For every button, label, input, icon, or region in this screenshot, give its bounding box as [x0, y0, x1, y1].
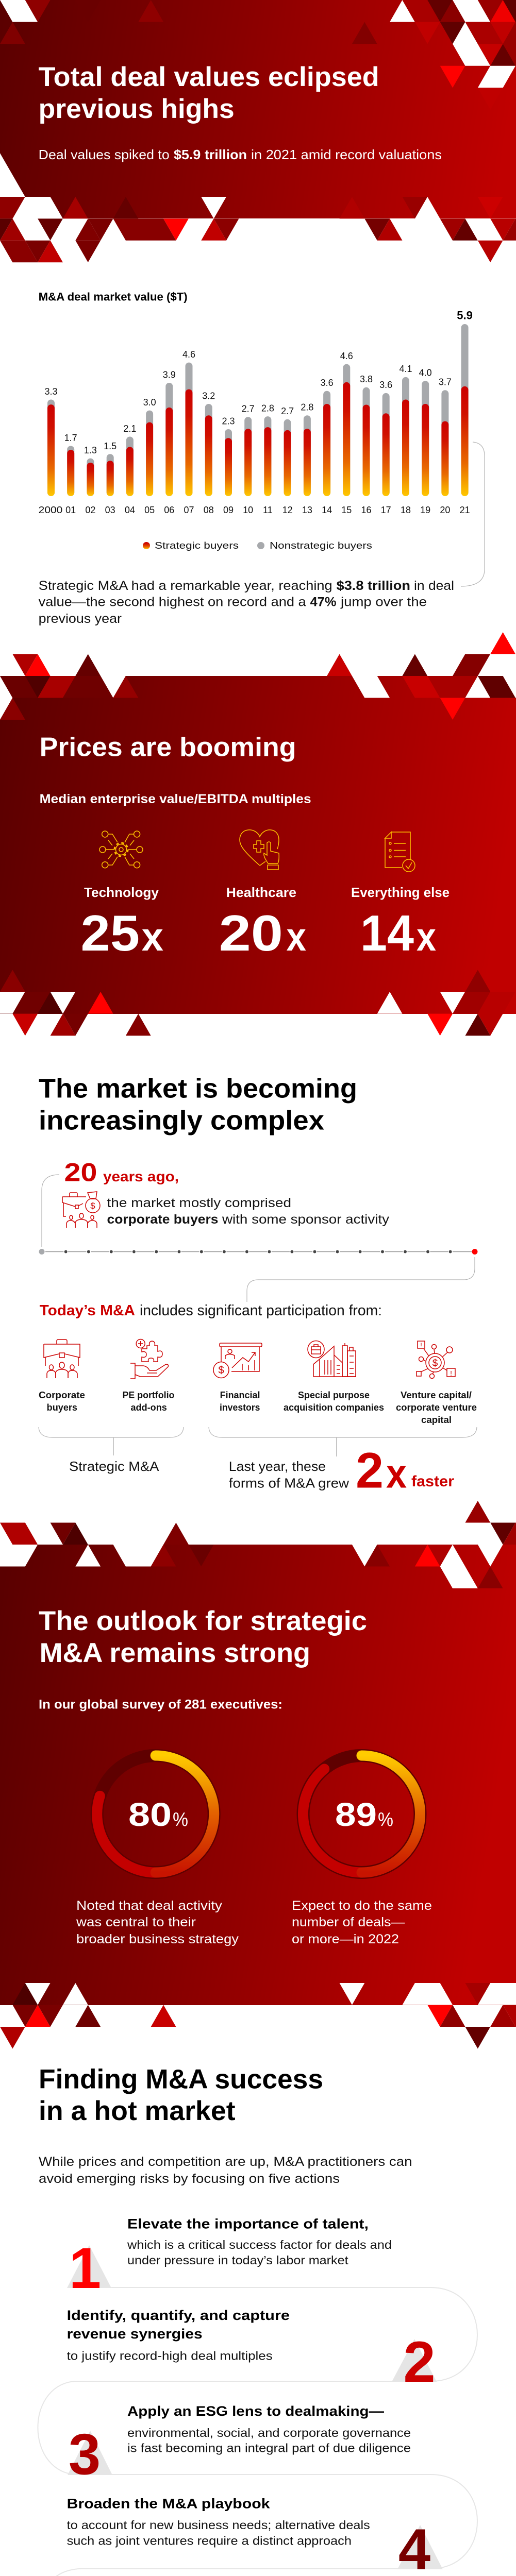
bar value labels: 2.1 — [123, 423, 136, 434]
x-axis year labels: 15 — [341, 505, 352, 515]
text: market comprised: the market mostly comprised — [107, 1196, 291, 1210]
x-axis year labels — [39, 505, 470, 515]
text: 20 years ago: 20 — [64, 1158, 97, 1187]
stat: technology: 25 — [80, 905, 140, 961]
x-axis year labels: 18 — [401, 505, 411, 515]
triangles: hero top — [0, 0, 516, 110]
panel: prices are booming — [0, 632, 516, 1036]
intro text: avoid emerging risks by focusing on five actions — [39, 2172, 340, 2186]
chart legend — [143, 540, 372, 551]
icon: PE portfolio add-ons — [130, 1340, 168, 1379]
x-axis year labels: 12 — [282, 505, 293, 515]
bar value labels: 3.0 — [143, 397, 156, 408]
x-axis year labels: 19 — [420, 505, 430, 515]
stat: technology — [80, 885, 163, 961]
bar value labels: 3.3 — [44, 386, 58, 397]
text: strategic M&A: Strategic M&A — [69, 1459, 159, 1474]
bar value labels: 2.8 — [261, 403, 274, 413]
connector: timeline to today — [247, 1257, 475, 1302]
participant labels: Corporate — [39, 1390, 85, 1400]
icon: corporate buyer with money bag: $ — [90, 1201, 95, 1211]
text: 80% caption: broader business strategy — [76, 1932, 239, 1946]
triangles: outlook bottom — [0, 1983, 516, 2048]
x-axis year labels: 10 — [243, 505, 253, 515]
chart note text: in deal — [414, 579, 454, 593]
heading: finding M&A success — [39, 2064, 323, 2126]
text: 89% caption: or more—in 2022 — [292, 1932, 399, 1946]
text: market comprised: corporate buyers — [107, 1212, 219, 1227]
bar value labels: 2.7 — [281, 406, 294, 416]
callout: 2x faster: Last year, these — [229, 1459, 326, 1474]
icon: corporate buyers — [44, 1340, 80, 1378]
chart legend: Nonstrategic buyers — [270, 540, 372, 551]
hero subtitle: in 2021 amid record valuations — [251, 147, 442, 162]
chart legend: Strategic buyers — [155, 540, 239, 551]
action 2: Identify, quantify, and capture — [67, 2308, 290, 2323]
stat: everything else: 14 — [360, 905, 414, 961]
hero subtitle — [39, 147, 442, 162]
triangles: prices bottom — [0, 970, 515, 1036]
heading: market complexity: increasingly complex — [39, 1106, 325, 1136]
bar value labels: 3.2 — [202, 391, 215, 401]
x-axis year labels: 20 — [440, 505, 450, 515]
participant labels — [39, 1390, 477, 1425]
action 1: under pressure in today’s labor market — [127, 2253, 348, 2267]
donut chart: 89%: % — [378, 1809, 393, 1831]
heading: market complexity — [39, 1074, 357, 1136]
stat: healthcare: 20 — [219, 905, 283, 961]
action 4: to account for new business needs; alternative deals — [67, 2518, 370, 2532]
bar value labels: 4.6 — [340, 351, 353, 361]
hero title — [39, 62, 379, 124]
action 3: environmental, social, and corporate governance — [127, 2426, 411, 2439]
stat: healthcare: Healthcare — [226, 885, 296, 900]
participant labels: acquisition companies — [284, 1402, 384, 1413]
bar value labels: 2.8 — [301, 402, 313, 412]
participant labels: Special purpose — [298, 1390, 370, 1400]
triangles: prices top — [0, 632, 516, 720]
x-axis year labels: 06 — [164, 505, 174, 515]
participant labels: Financial — [220, 1390, 260, 1400]
icon: corporate buyer with money bag — [62, 1192, 100, 1228]
x-axis year labels: 07 — [184, 505, 194, 515]
participant labels: buyers — [47, 1402, 77, 1413]
icon: financial investors: $ — [218, 1365, 224, 1376]
action 1: 1 — [69, 2236, 101, 2300]
heading: finding M&A success: Finding M&A success — [39, 2064, 323, 2095]
stat: everything else: x — [417, 914, 436, 959]
panel: hero — [0, 0, 516, 262]
participant labels: Venture capital/ — [401, 1390, 472, 1400]
chart note text: $3.8 trillion — [337, 579, 410, 593]
nonstrategic bars — [47, 324, 469, 496]
hero title: previous highs — [39, 94, 235, 124]
donut chart: 80% — [97, 1756, 214, 1872]
action 3: is fast becoming an integral part of due diligence — [127, 2442, 411, 2455]
icon: special purpose acquisition companies — [308, 1341, 356, 1377]
chart title: M&A deal market value ($T) — [39, 290, 188, 303]
bar value labels: 5.9 — [457, 309, 473, 321]
x-axis year labels: 02 — [85, 505, 95, 515]
stat: healthcare — [219, 885, 306, 961]
text: 80% caption: Noted that deal activity — [76, 1899, 223, 1913]
action 3: 3 — [69, 2422, 101, 2486]
bar value labels: 1.7 — [64, 433, 77, 443]
text: 89% caption: number of deals— — [292, 1915, 405, 1929]
x-axis year labels: 14 — [322, 505, 332, 515]
x-axis year labels: 17 — [381, 505, 391, 515]
icon: venture capital: ! — [450, 1369, 452, 1377]
x-axis year labels: 03 — [105, 505, 115, 515]
chart note text: Strategic M&A had a remarkable year, reaching — [39, 579, 332, 593]
stat: everything else: Everything else — [351, 885, 450, 900]
hero subtitle: $5.9 trillion — [174, 147, 247, 162]
icon: venture capital — [417, 1341, 455, 1379]
stat: technology: Technology — [84, 885, 159, 900]
heading: outlook: The outlook for strategic — [39, 1606, 367, 1636]
bar value labels: 4.0 — [419, 368, 432, 378]
panel: outlook — [0, 1501, 516, 2048]
action 3: Apply an ESG lens to dealmaking— — [127, 2403, 384, 2419]
triangles: hero bottom — [0, 153, 516, 262]
stat: technology: x — [142, 914, 163, 959]
callout: 2x faster: x — [386, 1451, 407, 1497]
x-axis year labels: 08 — [204, 505, 214, 515]
stat: everything else — [351, 885, 450, 961]
callout: 2x faster: faster — [411, 1473, 454, 1490]
bar value labels: 3.6 — [321, 378, 334, 388]
icon: venture capital: ! — [420, 1342, 422, 1349]
hero subtitle: Deal values spiked to — [39, 147, 170, 162]
bar value labels: 3.9 — [163, 370, 176, 380]
text: 80% caption: was central to their — [76, 1915, 196, 1929]
bar chart: M&A deal market value — [39, 290, 473, 551]
heading: outlook: M&A remains strong — [40, 1638, 310, 1668]
bar value labels: 3.7 — [439, 377, 452, 387]
heading: prices are booming: Prices are booming — [40, 733, 296, 762]
text: market comprised: with some sponsor activity — [222, 1212, 390, 1227]
triangles: outlook top — [0, 1501, 516, 1588]
participant labels: PE portfolio — [123, 1390, 174, 1400]
callout: 2x faster: forms of M&A grew — [229, 1476, 349, 1491]
x-axis year labels: 05 — [144, 505, 155, 515]
chart note text: previous year — [39, 612, 122, 626]
bracket: strategic M&A — [39, 1427, 184, 1455]
callout: 2x faster — [229, 1443, 454, 1499]
text: 20 years ago — [64, 1158, 179, 1187]
chart note text — [39, 579, 454, 626]
action 2: to justify record-high deal multiples — [67, 2349, 273, 2363]
text: 89% caption — [292, 1899, 432, 1946]
icon: everything else — [385, 832, 415, 872]
bar value labels: 2.3 — [222, 416, 235, 427]
x-axis year labels: 13 — [302, 505, 312, 515]
icon: healthcare — [240, 830, 279, 870]
x-axis year labels: 21 — [460, 505, 470, 515]
bar value labels — [44, 309, 473, 455]
icon: technology — [99, 831, 143, 868]
x-axis year labels: 11 — [263, 505, 273, 515]
subheading: survey: In our global survey of 281 executives: — [39, 1698, 282, 1712]
chart note text: value—the second highest on record and a — [39, 595, 306, 609]
participant labels: corporate venture — [396, 1402, 477, 1413]
strategic bars — [47, 382, 469, 496]
bar value labels: 1.3 — [84, 445, 97, 455]
bar value labels: 1.5 — [104, 441, 116, 451]
donut chart: 80%: % — [173, 1809, 188, 1831]
donut chart: 80%: 80 — [128, 1796, 172, 1833]
hero title: Total deal values eclipsed — [39, 62, 379, 92]
text: today's M&A: Today’s M&A — [40, 1302, 135, 1319]
donut chart: 89% — [303, 1756, 420, 1872]
action 1: which is a critical success factor for deals and — [127, 2238, 392, 2251]
bracket: other forms — [209, 1427, 477, 1456]
connector: chart to note — [461, 442, 485, 586]
intro text: While prices and competition are up, M&A practitioners can — [39, 2155, 412, 2169]
heading: finding M&A success: in a hot market — [39, 2096, 236, 2126]
text: 80% caption — [76, 1899, 239, 1946]
action 3 — [68, 2403, 411, 2486]
bar value labels: 3.6 — [379, 380, 392, 390]
action 4: such as joint ventures require a distinct approach — [67, 2534, 352, 2548]
participant labels: add-ons — [131, 1402, 167, 1413]
action 2 — [67, 2308, 437, 2394]
action 2: revenue synergies — [67, 2326, 203, 2342]
action 1 — [67, 2216, 392, 2300]
text: today's M&A: includes significant participation from: — [140, 1302, 382, 1319]
bar value labels: 4.6 — [182, 349, 195, 360]
text: 20 years ago: years ago, — [103, 1168, 179, 1184]
participant labels: capital — [421, 1415, 452, 1425]
heading: market complexity: The market is becoming — [39, 1074, 357, 1104]
intro text — [39, 2155, 412, 2186]
chart note text: 47% — [310, 595, 336, 609]
bar value labels: 3.8 — [360, 374, 373, 384]
action 4: Broaden the M&A playbook — [67, 2496, 271, 2512]
heading: outlook — [39, 1606, 367, 1668]
callout: 2x faster: 2 — [356, 1443, 384, 1499]
x-axis year labels: 01 — [65, 505, 76, 515]
x-axis year labels: 04 — [125, 505, 135, 515]
timeline — [39, 1249, 477, 1255]
text: 89% caption: Expect to do the same — [292, 1899, 432, 1913]
action 2: 2 — [403, 2330, 436, 2394]
action 1: Elevate the importance of talent, — [127, 2216, 369, 2232]
bar value labels: 4.1 — [399, 364, 412, 374]
bar value labels: 2.7 — [242, 404, 255, 414]
action 4 — [67, 2496, 443, 2576]
donut chart: 89%: 89 — [335, 1796, 377, 1833]
serpentine path — [38, 2287, 477, 2576]
x-axis year labels: 09 — [223, 505, 234, 515]
connector: timeline top-left — [42, 1175, 59, 1247]
participant labels: investors — [220, 1402, 260, 1413]
icon: financial investors — [213, 1343, 262, 1378]
icon: venture capital: $ — [432, 1358, 438, 1369]
subheading: multiples: Median enterprise value/EBITDA multiples — [40, 792, 311, 806]
text: market comprised — [107, 1196, 390, 1227]
x-axis year labels: 2000 — [39, 505, 62, 515]
text: today's M&A — [40, 1302, 382, 1319]
chart note text: jump over the — [340, 595, 427, 609]
x-axis year labels: 16 — [361, 505, 372, 515]
stat: healthcare: x — [287, 914, 306, 959]
